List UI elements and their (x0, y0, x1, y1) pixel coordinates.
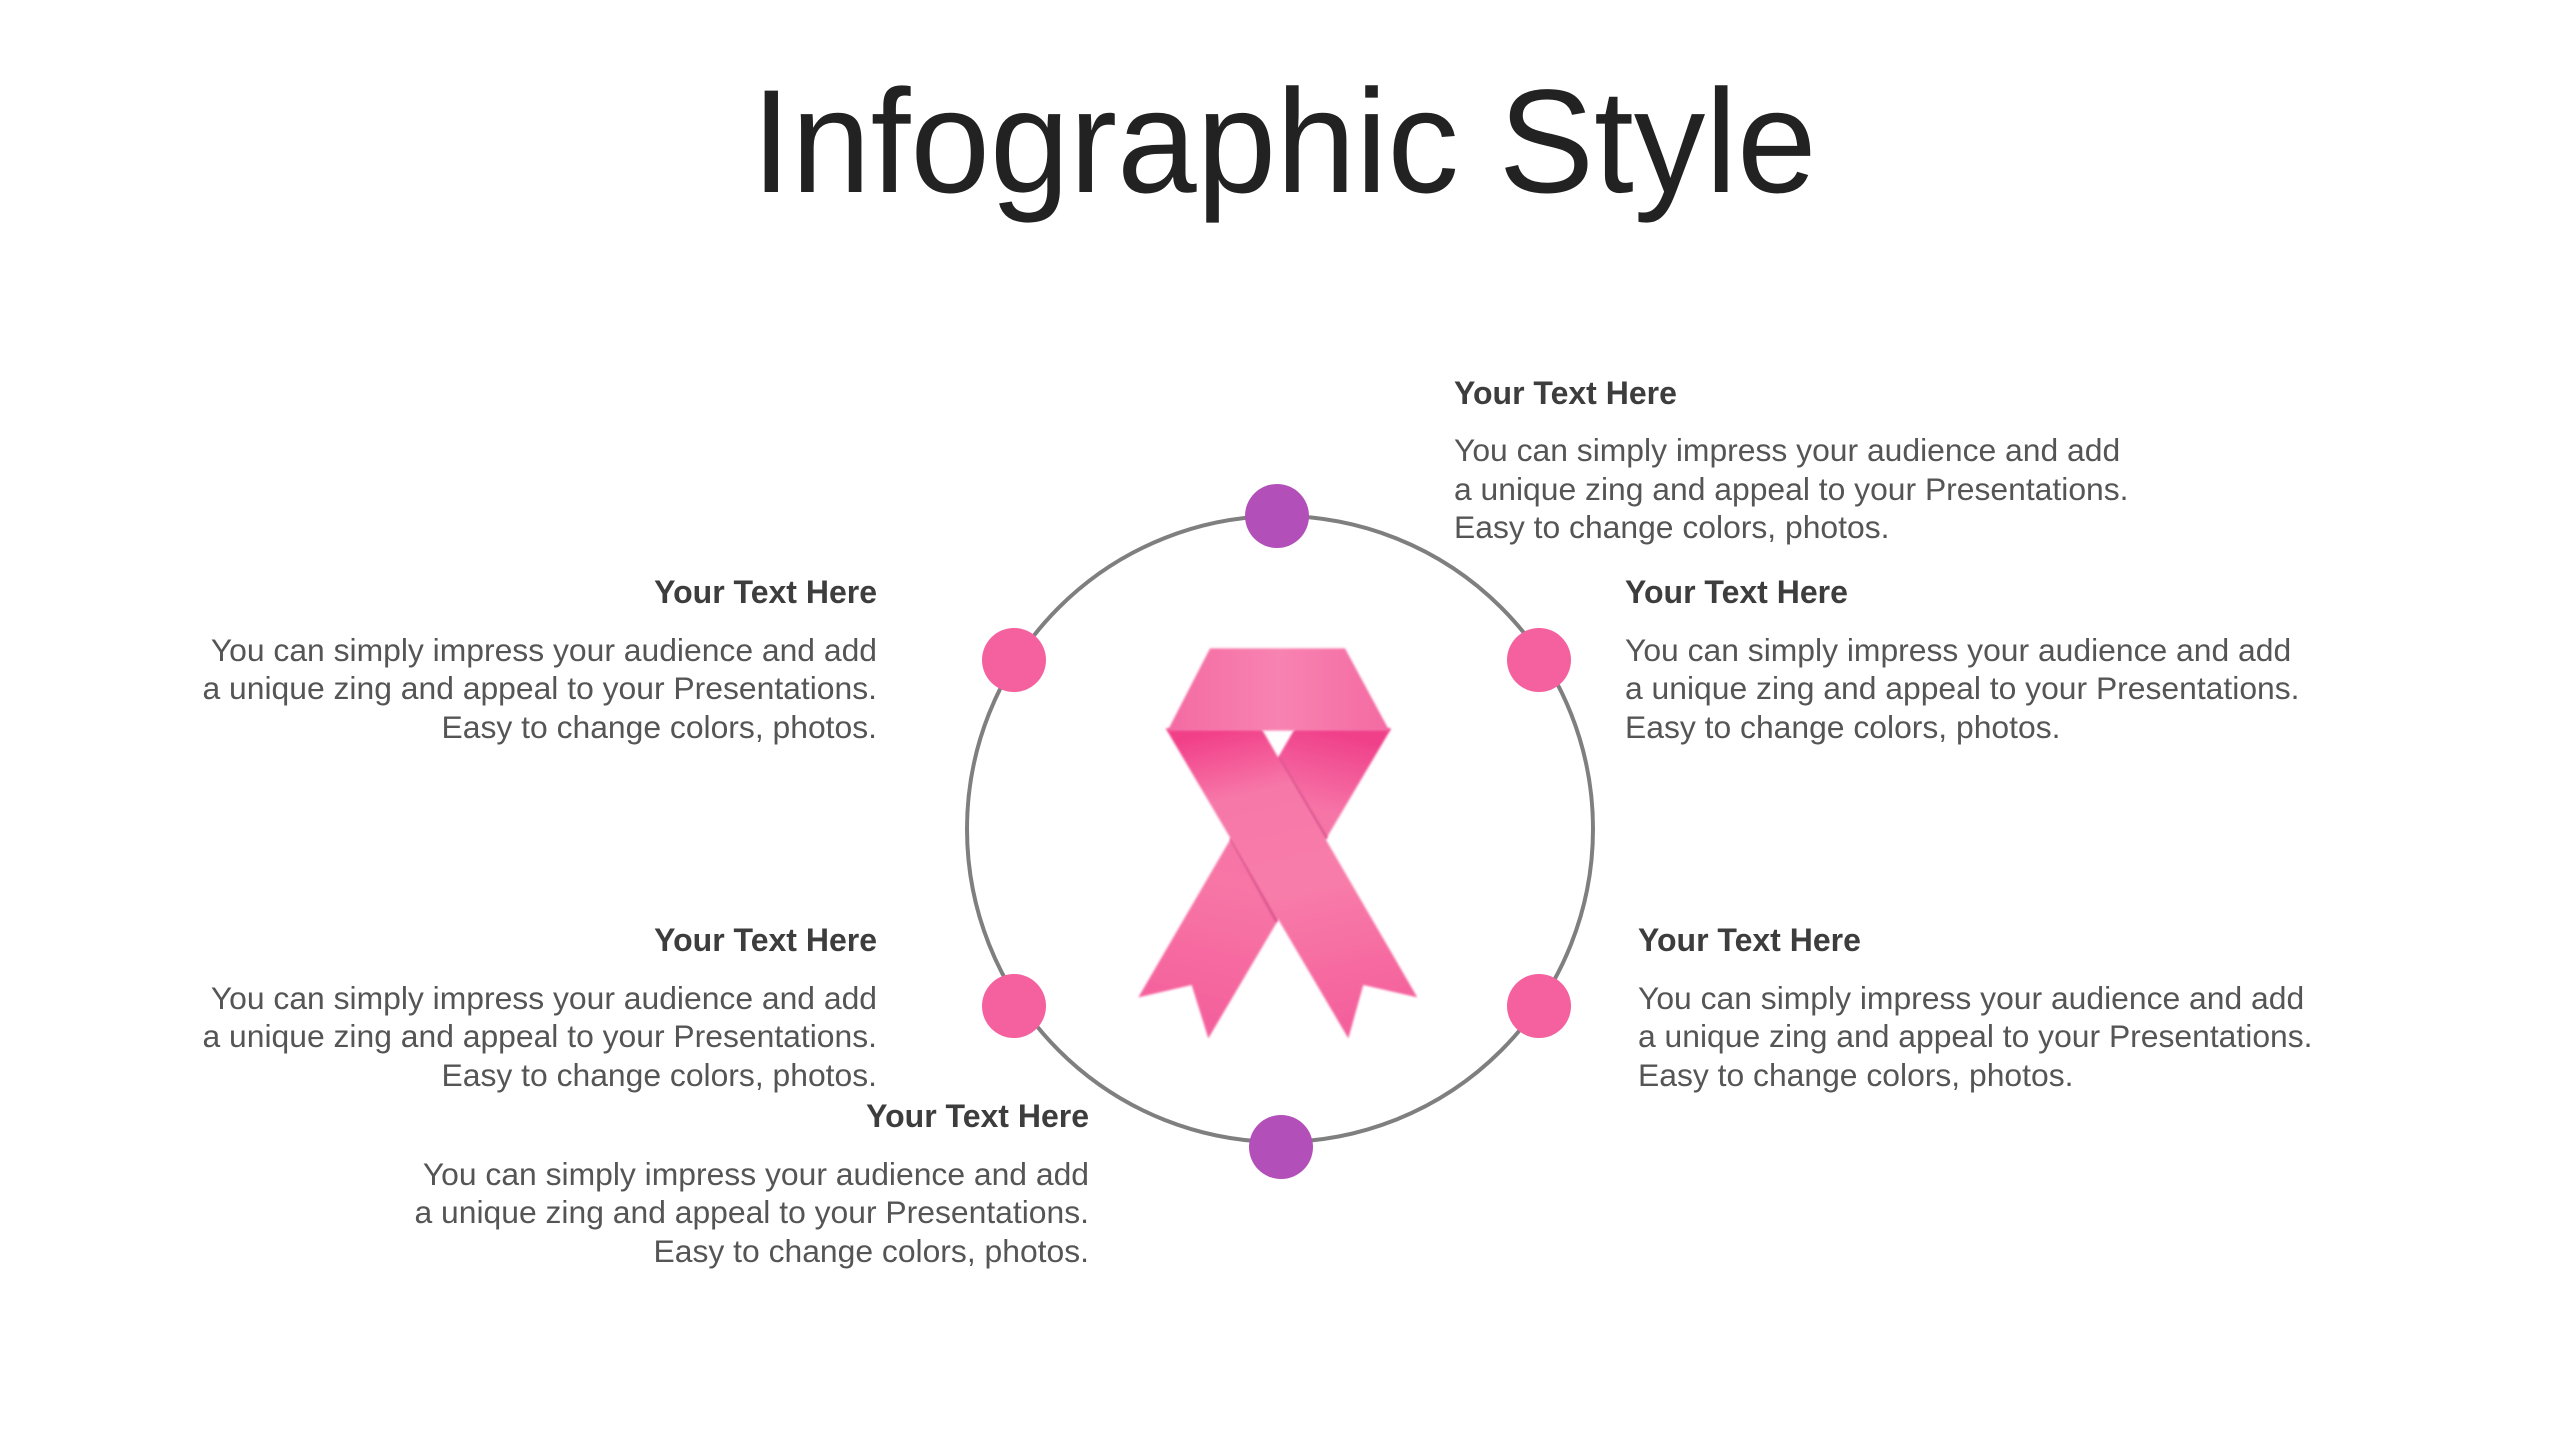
text block: upper left (202, 574, 877, 745)
text block: upper right (1625, 574, 2300, 745)
text block: upper left: Easy to change colors, photos. (442, 709, 877, 745)
text block: upper right: Your Text Here (1625, 574, 1848, 610)
text block: lower right: Your Text Here (1638, 922, 1861, 958)
text block: top: Easy to change colors, photos. (1454, 509, 1889, 545)
text block: upper right: a unique zing and appeal to your Presentations. (1625, 670, 2300, 706)
title: Infographic Style (751, 59, 1817, 223)
text block: lower left: a unique zing and appeal to your Presentations. (202, 1018, 877, 1054)
text block: top (1454, 375, 2129, 545)
text block: upper left: You can simply impress your audience and add (211, 632, 877, 668)
text block: lower left: Your Text Here (654, 922, 877, 958)
text block: upper right: Easy to change colors, photos. (1625, 709, 2060, 745)
dot: bottom (1249, 1115, 1313, 1179)
dot: lower left (982, 974, 1046, 1038)
text block: bottom: a unique zing and appeal to your Presentations. (414, 1194, 1089, 1230)
ribbon front strip (1166, 728, 1417, 1038)
text block: top: You can simply impress your audience and add (1454, 432, 2120, 468)
text block: lower right: Easy to change colors, photos. (1638, 1057, 2073, 1093)
text block: upper left: a unique zing and appeal to your Presentations. (202, 670, 877, 706)
text block: lower left (202, 922, 877, 1093)
text block: lower left: You can simply impress your audience and add (211, 980, 877, 1016)
text block: top: Your Text Here (1454, 375, 1677, 411)
dot: top (1245, 484, 1309, 548)
dot: upper right (1507, 628, 1571, 692)
dot: upper left (982, 628, 1046, 692)
text block: bottom: Your Text Here (866, 1098, 1089, 1134)
text block: lower right: You can simply impress your audience and add (1638, 980, 2304, 1016)
text block: lower right: a unique zing and appeal to your Presentations. (1638, 1018, 2313, 1054)
text block: upper left: Your Text Here (654, 574, 877, 610)
text block: upper right: You can simply impress your audience and add (1625, 632, 2291, 668)
icon: pink ribbon (1138, 648, 1417, 1038)
text block: top: a unique zing and appeal to your Presentations. (1454, 471, 2129, 507)
ribbon fold shadow (1231, 757, 1327, 922)
ribbon top band (1168, 648, 1389, 731)
text block: bottom: Easy to change colors, photos. (654, 1233, 1089, 1269)
text block: lower right (1638, 922, 2313, 1093)
text block: bottom: You can simply impress your audience and add (423, 1156, 1089, 1192)
ribbon band crease (1169, 728, 1387, 738)
ribbon back strip (1138, 728, 1391, 1038)
ring (967, 516, 1593, 1142)
dot: lower right (1507, 974, 1571, 1038)
text block: lower left: Easy to change colors, photos. (442, 1057, 877, 1093)
text block: bottom (414, 1098, 1089, 1269)
